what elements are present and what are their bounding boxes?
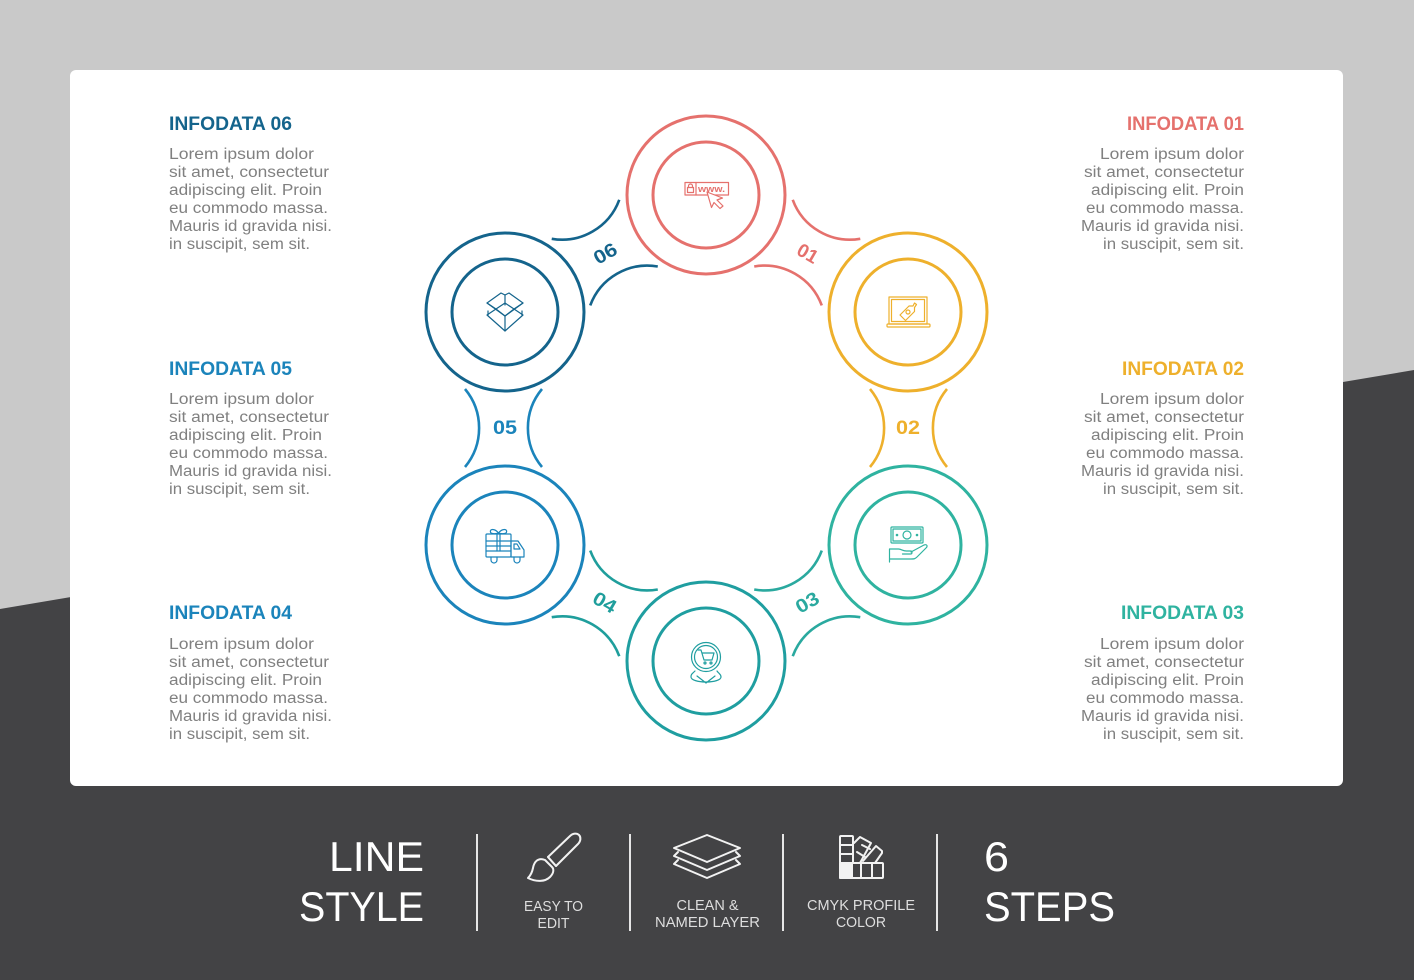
text block: infodata 06 bbox=[169, 114, 332, 253]
feature: clean and named layer bbox=[655, 835, 760, 931]
text block: infodata 05: sit amet, consectetur bbox=[169, 409, 329, 426]
feature: easy to edit: EDIT bbox=[538, 915, 570, 932]
text block: infodata 03 bbox=[1081, 603, 1244, 743]
icon: url bar with cursor: www. bbox=[697, 184, 725, 194]
text block: infodata 02: Lorem ipsum dolor bbox=[1100, 391, 1244, 408]
text block: infodata 03: Mauris id gravida nisi. bbox=[1081, 708, 1244, 725]
feature: easy to edit: EASY TO bbox=[524, 898, 583, 915]
text block: infodata 04: Lorem ipsum dolor bbox=[169, 636, 314, 653]
text block: infodata 01: Mauris id gravida nisi. bbox=[1081, 218, 1244, 235]
text block: infodata 05: adipiscing elit. Proin bbox=[169, 427, 322, 444]
icon: url bar with cursor bbox=[685, 182, 728, 208]
feature: clean and named layer: CLEAN & bbox=[676, 897, 738, 914]
text block: infodata 04: Mauris id gravida nisi. bbox=[169, 708, 332, 725]
icon: laptop with tag bbox=[887, 297, 930, 327]
white card panel bbox=[70, 70, 1343, 786]
step 06 circle bbox=[426, 233, 584, 391]
text block: infodata 02: eu commodo massa. bbox=[1086, 445, 1244, 462]
step 04 circle bbox=[627, 582, 785, 740]
text block: infodata 01: sit amet, consectetur bbox=[1084, 164, 1244, 181]
text block: infodata 04 bbox=[169, 603, 332, 743]
title: line style: LINE bbox=[329, 833, 424, 880]
icon: colour swatch fan bbox=[840, 836, 883, 878]
text block: infodata 06: Mauris id gravida nisi. bbox=[169, 218, 332, 235]
text block: infodata 03: eu commodo massa. bbox=[1086, 690, 1244, 707]
title: 6 steps: 6 bbox=[984, 833, 1009, 880]
text block: infodata 04: in suscipit, sem sit. bbox=[169, 726, 310, 743]
feature: cmyk profile color: COLOR bbox=[836, 914, 886, 931]
text block: infodata 01 bbox=[1081, 114, 1244, 253]
text block: infodata 02: adipiscing elit. Proin bbox=[1091, 427, 1244, 444]
text block: infodata 05: Lorem ipsum dolor bbox=[169, 391, 314, 408]
text block: infodata 05: INFODATA 05 bbox=[169, 359, 292, 380]
icon: delivery truck with gift bbox=[486, 530, 524, 563]
text block: infodata 01: eu commodo massa. bbox=[1086, 200, 1244, 217]
step 03 circle bbox=[829, 466, 987, 624]
text block: infodata 02: in suscipit, sem sit. bbox=[1103, 481, 1244, 498]
text block: infodata 04: adipiscing elit. Proin bbox=[169, 672, 322, 689]
text block: infodata 02: sit amet, consectetur bbox=[1084, 409, 1244, 426]
text block: infodata 04: sit amet, consectetur bbox=[169, 654, 329, 671]
connector 02 bbox=[870, 389, 947, 467]
icon: hand with banknote bbox=[890, 527, 927, 562]
text block: infodata 04: eu commodo massa. bbox=[169, 690, 328, 707]
connector 01 bbox=[754, 200, 860, 305]
text block: infodata 03: sit amet, consectetur bbox=[1084, 654, 1244, 671]
text block: infodata 06: in suscipit, sem sit. bbox=[169, 236, 310, 253]
text block: infodata 05: Mauris id gravida nisi. bbox=[169, 463, 332, 480]
text block: infodata 05: in suscipit, sem sit. bbox=[169, 481, 310, 498]
title: line style bbox=[299, 833, 424, 930]
feature: cmyk profile color: CMYK PROFILE bbox=[807, 897, 915, 914]
text block: infodata 01: in suscipit, sem sit. bbox=[1103, 236, 1244, 253]
text block: infodata 02: INFODATA 02 bbox=[1122, 359, 1244, 380]
divider lines bbox=[477, 834, 937, 931]
feature: easy to edit bbox=[524, 834, 583, 932]
text block: infodata 06: Lorem ipsum dolor bbox=[169, 146, 314, 163]
connector 03 bbox=[754, 551, 860, 656]
title: 6 steps: STEPS bbox=[984, 883, 1115, 930]
title: line style: STYLE bbox=[299, 883, 424, 930]
step 02 circle bbox=[829, 233, 987, 391]
number 03: 03 bbox=[792, 588, 823, 618]
number 06: 06 bbox=[590, 239, 621, 269]
icon: map pin with cart bbox=[691, 642, 721, 683]
text block: infodata 05: eu commodo massa. bbox=[169, 445, 328, 462]
text block: infodata 04: INFODATA 04 bbox=[169, 603, 292, 624]
text block: infodata 03: adipiscing elit. Proin bbox=[1091, 672, 1244, 689]
connector 06 bbox=[552, 200, 658, 305]
feature: cmyk profile color bbox=[807, 836, 915, 931]
text block: infodata 03: INFODATA 03 bbox=[1121, 603, 1244, 624]
text block: infodata 06: eu commodo massa. bbox=[169, 200, 328, 217]
icon: paint brush bbox=[528, 834, 580, 881]
text block: infodata 06: sit amet, consectetur bbox=[169, 164, 329, 181]
text block: infodata 01: adipiscing elit. Proin bbox=[1091, 182, 1244, 199]
number 05: 05 bbox=[493, 418, 517, 439]
step 05 circle bbox=[426, 466, 584, 624]
step 01 circle bbox=[627, 116, 785, 274]
text block: infodata 01: Lorem ipsum dolor bbox=[1100, 146, 1244, 163]
text block: infodata 02 bbox=[1081, 359, 1244, 498]
text block: infodata 03: in suscipit, sem sit. bbox=[1103, 726, 1244, 743]
icon: stacked layers bbox=[674, 835, 740, 878]
feature: clean and named layer: NAMED LAYER bbox=[655, 914, 760, 931]
title: 6 steps bbox=[984, 833, 1115, 930]
connector 05 bbox=[465, 389, 542, 467]
text block: infodata 03: Lorem ipsum dolor bbox=[1100, 636, 1244, 653]
text block: infodata 02: Mauris id gravida nisi. bbox=[1081, 463, 1244, 480]
number 04: 04 bbox=[589, 588, 620, 619]
background dark band bbox=[0, 370, 1414, 980]
text block: infodata 06: adipiscing elit. Proin bbox=[169, 182, 322, 199]
text block: infodata 01: INFODATA 01 bbox=[1127, 114, 1244, 135]
text block: infodata 05 bbox=[169, 359, 332, 498]
text block: infodata 06: INFODATA 06 bbox=[169, 114, 292, 135]
number 02: 02 bbox=[896, 418, 920, 439]
connector 04 bbox=[552, 551, 658, 656]
icon: open box bbox=[487, 293, 523, 331]
number 01: 01 bbox=[793, 240, 822, 269]
